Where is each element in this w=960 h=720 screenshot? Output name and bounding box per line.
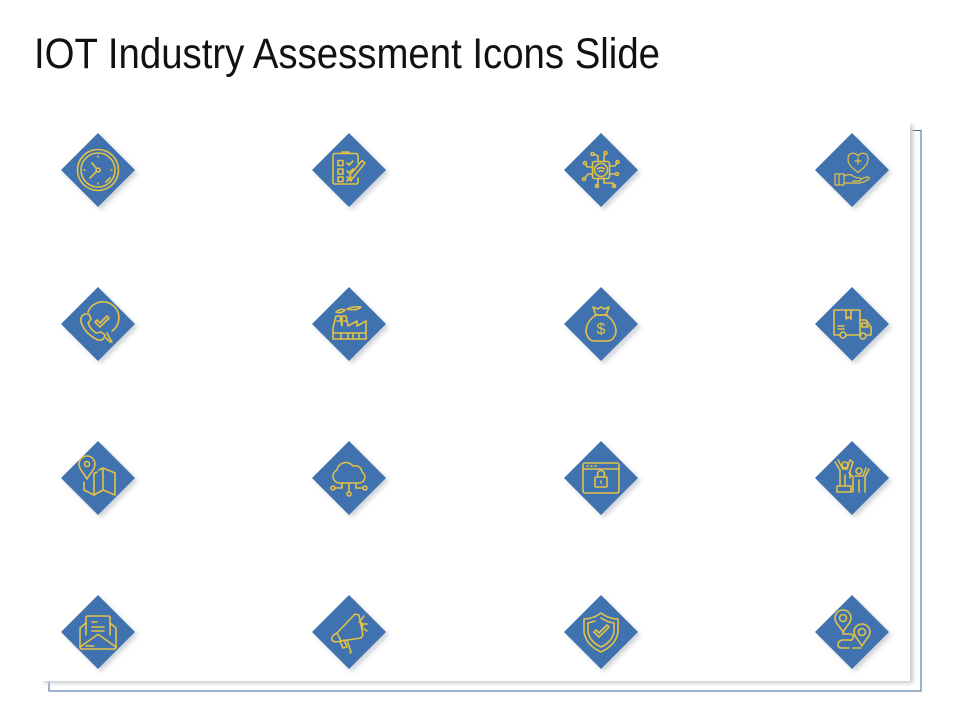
icon: map with pin xyxy=(61,441,138,518)
icon: phone with check xyxy=(61,287,138,364)
icon: megaphone xyxy=(312,595,389,672)
icon: route with two pins xyxy=(815,595,892,672)
icon: browser lock xyxy=(564,441,641,518)
icon: cloud network xyxy=(312,441,389,518)
icon: open envelope xyxy=(61,595,138,672)
icon: heart on hand xyxy=(815,133,892,210)
icon: clock xyxy=(61,133,138,210)
title: IOT Industry Assessment Icons Slide xyxy=(34,30,660,78)
icon: checklist and pencil xyxy=(312,133,389,210)
background frame xyxy=(38,118,921,691)
icon: delivery truck xyxy=(815,287,892,364)
icon: money bag xyxy=(564,287,641,364)
icon: factory xyxy=(312,287,389,364)
icon: security shield xyxy=(564,595,641,672)
icon: people celebrating xyxy=(815,441,892,518)
icon: money bag: $ xyxy=(597,321,606,338)
icon: circuit chip xyxy=(564,133,641,210)
